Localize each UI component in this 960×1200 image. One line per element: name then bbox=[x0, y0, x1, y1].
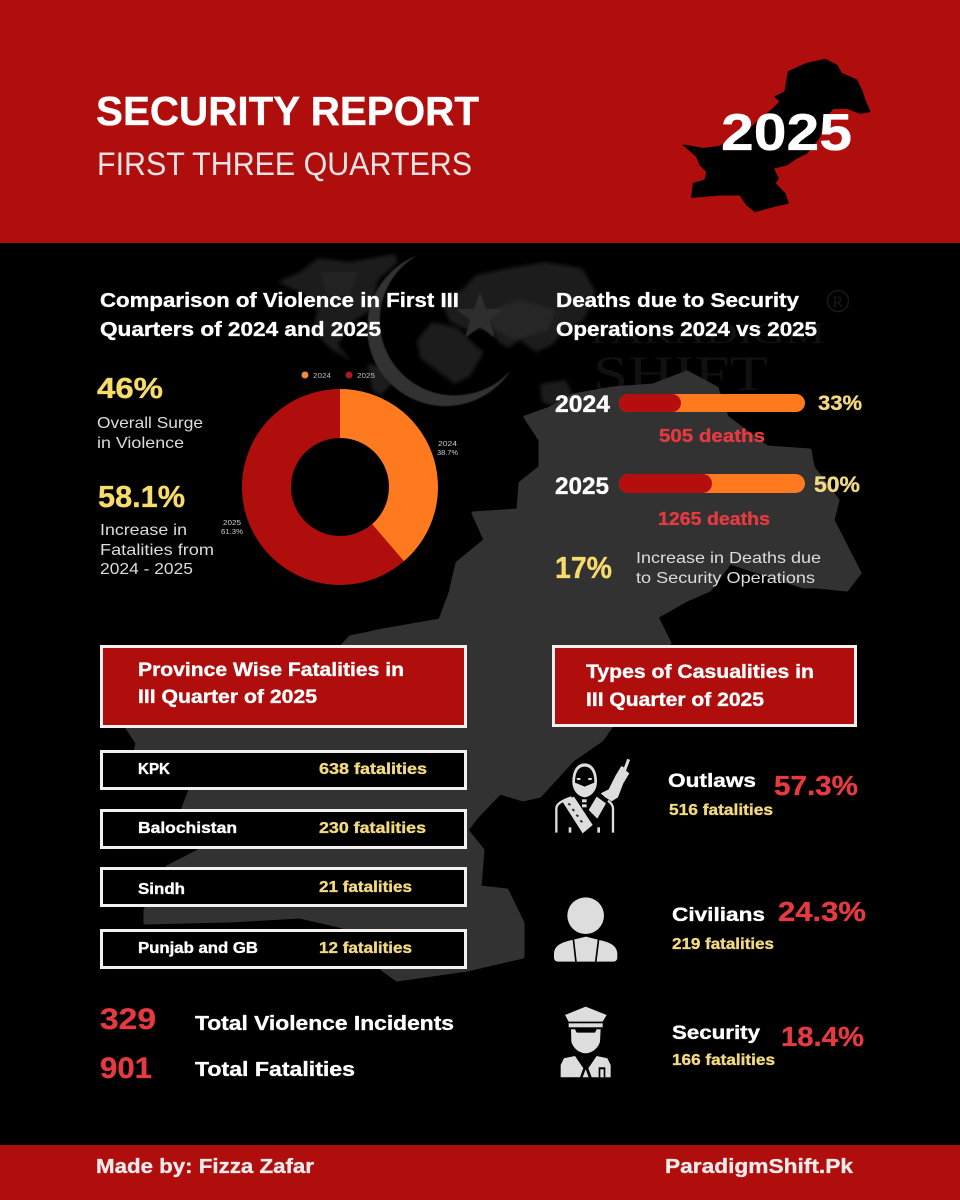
chart legend bbox=[302, 371, 375, 380]
bar row 2024: 505 deaths bbox=[659, 426, 765, 446]
stat: 17% increase: 17% bbox=[555, 550, 612, 585]
heading box: province bbox=[102, 646, 466, 726]
label: security bbox=[672, 1021, 864, 1069]
bar row 2024: 33% bbox=[818, 392, 862, 415]
donut label 2025: 61.3% bbox=[221, 527, 243, 536]
heading box: casualties: Types of Casualities in bbox=[586, 662, 814, 683]
stat: 46% surge bbox=[97, 373, 203, 452]
year: 2025 bbox=[721, 104, 852, 162]
stat: 17% increase: to Security Operations bbox=[636, 570, 815, 587]
label: security: Security bbox=[672, 1023, 761, 1044]
donut label 2025: 2025 bbox=[223, 518, 241, 527]
stat: 46% surge: in Violence bbox=[97, 435, 184, 452]
heading box: province: Province Wise Fatalities in bbox=[138, 660, 404, 681]
faint Paradigm Shift wordmark: PARADIGM bbox=[590, 317, 825, 350]
icon: outlaw with rifle bbox=[556, 759, 630, 833]
panel: comparison of violence bbox=[97, 290, 459, 585]
stat: 46% surge: 46% bbox=[97, 373, 163, 405]
total fatalities bbox=[100, 1052, 355, 1085]
stat: 58.1% fatalities: 58.1% bbox=[98, 479, 185, 514]
heading: comparison: Comparison of Violence in First III bbox=[100, 290, 459, 312]
heading: deaths: Operations 2024 vs 2025 bbox=[556, 319, 817, 341]
bar row 2024: 2024 bbox=[555, 391, 611, 418]
stat: 17% increase bbox=[555, 550, 821, 587]
stat: 58.1% fatalities: Fatalities from bbox=[100, 542, 214, 559]
row: Punjab and GB bbox=[102, 930, 466, 968]
label: security: 166 fatalities bbox=[672, 1052, 775, 1069]
heading: comparison: Quarters of 2024 and 2025 bbox=[100, 319, 381, 341]
row: Balochistan: Balochistan bbox=[138, 820, 237, 837]
total fatalities: Total Fatalities bbox=[195, 1059, 355, 1081]
total incidents: Total Violence Incidents bbox=[195, 1013, 454, 1035]
heading box: casualties bbox=[554, 646, 856, 726]
row: Sindh bbox=[102, 868, 466, 906]
icon: security officer bbox=[561, 1007, 611, 1077]
label: security: 18.4% bbox=[781, 1021, 864, 1052]
faint Paradigm Shift wordmark: R bbox=[832, 294, 844, 311]
label: outlaws: 57.3% bbox=[774, 770, 858, 801]
row: Sindh: 21 fatalities bbox=[319, 879, 412, 896]
row: Sindh: Sindh bbox=[138, 881, 185, 898]
label: civilians: Civilians bbox=[672, 905, 765, 926]
label: outlaws bbox=[668, 770, 858, 819]
row: Punjab and GB: 12 fatalities bbox=[319, 940, 412, 957]
stat: 58.1% fatalities: Increase in bbox=[100, 522, 187, 539]
row: Balochistan bbox=[102, 810, 466, 848]
donut label 2024: 38.7% bbox=[437, 448, 458, 457]
icon: Pakistan map silhouette bbox=[683, 59, 870, 212]
bar row 2024 bbox=[555, 391, 862, 446]
chart legend: 2024 bbox=[313, 371, 331, 380]
faint Paradigm Shift wordmark bbox=[590, 290, 848, 401]
donut label 2025 bbox=[221, 518, 243, 536]
row: Punjab and GB: Punjab and GB bbox=[138, 940, 258, 957]
label: outlaws: Outlaws bbox=[668, 771, 756, 792]
faint Paradigm Shift wordmark: SHIFT bbox=[593, 345, 768, 401]
bar row 2025: 50% bbox=[814, 472, 860, 497]
background watermark: world map, crescent, Pakistan map bbox=[127, 254, 860, 980]
footer site name: ParadigmShift.Pk bbox=[665, 1156, 854, 1178]
donut label 2024 bbox=[437, 439, 458, 457]
donut chart bbox=[242, 389, 438, 585]
footer band bbox=[0, 1145, 960, 1200]
heading: comparison bbox=[100, 290, 459, 341]
total incidents bbox=[100, 1003, 454, 1036]
panel: deaths due to security operations bbox=[555, 290, 862, 587]
label: civilians bbox=[672, 896, 866, 953]
panel: province wise fatalities bbox=[100, 646, 466, 1085]
donut label 2024: 2024 bbox=[438, 439, 457, 448]
heading: deaths bbox=[556, 290, 817, 341]
bar row 2025 bbox=[555, 472, 860, 529]
row: KPK: KPK bbox=[138, 761, 171, 778]
chart legend: 2025 bbox=[357, 371, 375, 380]
icon: civilian bbox=[554, 897, 617, 962]
stat: 17% increase: Increase in Deaths due bbox=[636, 550, 821, 567]
total fatalities: 901 bbox=[100, 1052, 152, 1085]
heading: deaths: Deaths due to Security bbox=[556, 290, 800, 312]
subtitle: FIRST THREE QUARTERS bbox=[97, 146, 472, 182]
header band bbox=[0, 0, 960, 243]
heading box: casualties: III Quarter of 2025 bbox=[586, 690, 764, 711]
row: Balochistan: 230 fatalities bbox=[319, 820, 426, 837]
label: outlaws: 516 fatalities bbox=[669, 802, 773, 819]
label: civilians: 24.3% bbox=[778, 896, 866, 927]
row: KPK bbox=[102, 752, 466, 788]
bar row 2025: 1265 deaths bbox=[658, 509, 770, 529]
stat: 46% surge: Overall Surge bbox=[97, 415, 203, 432]
total incidents: 329 bbox=[100, 1003, 156, 1036]
crescent and star bbox=[367, 255, 511, 406]
footer credit: Made by: Fizza Zafar bbox=[96, 1156, 314, 1178]
panel: types of casualties bbox=[554, 646, 866, 1077]
stat: 58.1% fatalities: 2024 - 2025 bbox=[100, 561, 193, 578]
title: SECURITY REPORT bbox=[96, 88, 479, 134]
row: KPK: 638 fatalities bbox=[319, 761, 427, 778]
label: civilians: 219 fatalities bbox=[672, 936, 774, 953]
stat: 58.1% fatalities bbox=[98, 479, 214, 578]
bar row 2025: 2025 bbox=[555, 473, 609, 500]
heading box: province: III Quarter of 2025 bbox=[138, 687, 317, 708]
large grey Pakistan map bbox=[127, 372, 860, 980]
faint world map bbox=[277, 254, 596, 406]
